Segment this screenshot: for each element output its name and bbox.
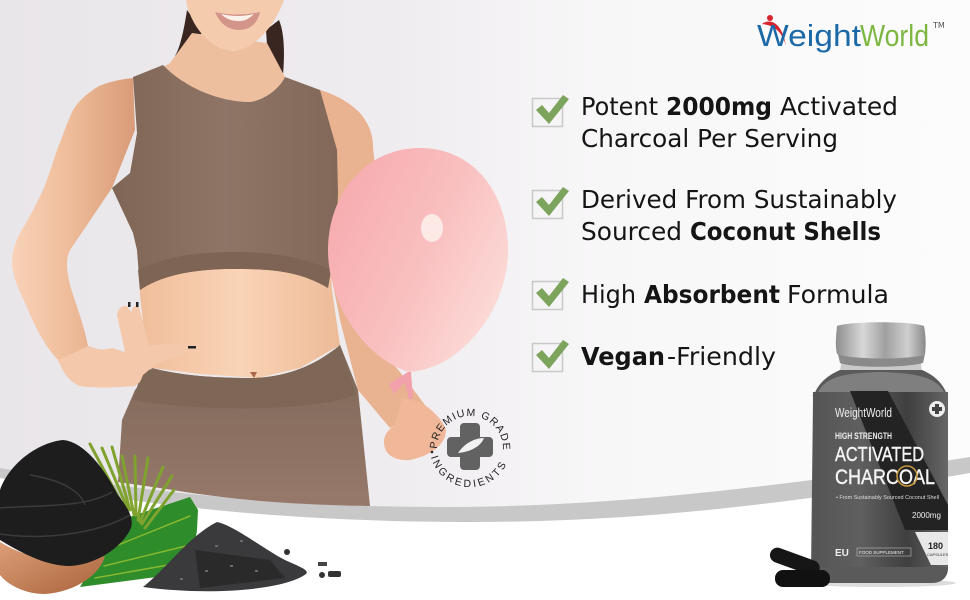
product bottle: 2000mg bbox=[912, 511, 941, 520]
coconut shell bbox=[0, 542, 105, 594]
check item 3: Formula bbox=[787, 280, 889, 309]
label text: WeightWorld bbox=[835, 405, 892, 420]
white swoosh base bbox=[0, 457, 970, 600]
woman figure bbox=[12, 0, 446, 506]
product bottle: FOOD SUPPLEMENT bbox=[859, 550, 904, 555]
badge: premium grade ingredients: INGREDIENTS bbox=[431, 456, 506, 487]
palm leaf bbox=[80, 444, 198, 587]
label dark band bbox=[850, 391, 948, 530]
product bottle: ACTIVATED bbox=[835, 444, 924, 466]
check item 4: Vegan bbox=[581, 342, 665, 371]
bottle cap bbox=[836, 322, 926, 358]
crop top hem bbox=[138, 252, 331, 290]
capsules bbox=[768, 546, 822, 577]
badge cross icon bbox=[447, 423, 493, 470]
smile bbox=[215, 12, 260, 30]
shorts bbox=[118, 345, 370, 506]
check item 2 bbox=[532, 185, 897, 246]
logo text: Weight bbox=[757, 18, 861, 53]
check item 2: Sourced bbox=[581, 217, 682, 246]
check item 4 bbox=[532, 340, 776, 372]
cap ring bbox=[838, 354, 925, 367]
logo figure bbox=[762, 22, 786, 46]
product bottle: • From Sustainably Sourced Coconut Shell bbox=[836, 495, 939, 501]
bottle glass bbox=[811, 370, 948, 583]
badge text: PREMIUM GRADE bbox=[430, 408, 510, 450]
logo: WeightWorld: World bbox=[860, 18, 929, 53]
charcoal, palm leaf and powder bbox=[0, 440, 341, 594]
check item 1 bbox=[532, 92, 898, 153]
charcoal chunk bbox=[0, 440, 132, 566]
charcoal layers bbox=[0, 475, 130, 536]
bottle shadow bbox=[804, 579, 956, 587]
badge leaf bbox=[458, 438, 484, 453]
label seal bbox=[929, 401, 945, 417]
balloon hand bbox=[384, 398, 446, 460]
powder specks bbox=[180, 540, 258, 580]
neck bbox=[163, 33, 285, 102]
balloon knot bbox=[389, 372, 413, 400]
charcoal powder bbox=[143, 522, 307, 591]
check item 3: High bbox=[581, 280, 636, 309]
label EU and supplement: EU bbox=[835, 548, 849, 559]
check item 4: -Friendly bbox=[667, 342, 776, 371]
check item 3 bbox=[532, 278, 889, 310]
check item 1: Activated bbox=[780, 92, 898, 121]
check item 2: Derived From Sustainably bbox=[581, 185, 897, 214]
badge: premium grade ingredients bbox=[430, 408, 510, 487]
logo: WeightWorld bbox=[757, 15, 945, 53]
crop top bbox=[112, 65, 338, 290]
label corner 180 capsules bbox=[915, 532, 948, 565]
left arm bbox=[12, 78, 135, 380]
face bbox=[186, 0, 284, 51]
pointing hand bbox=[58, 306, 195, 388]
check item 2: Coconut Shells bbox=[690, 217, 881, 246]
check item 1: Potent bbox=[581, 92, 658, 121]
benefit list bbox=[532, 92, 898, 372]
product bottle: CAPSULES bbox=[927, 552, 949, 557]
product bottle bbox=[768, 322, 956, 587]
balloon highlight bbox=[421, 214, 443, 242]
midriff bbox=[138, 262, 340, 378]
waistband shade bbox=[133, 345, 356, 408]
right arm bbox=[320, 90, 425, 428]
hair bbox=[175, 10, 284, 75]
product bottle: CHARCOAL bbox=[835, 466, 935, 489]
navel bbox=[250, 372, 257, 378]
bottle label bbox=[813, 392, 948, 567]
product bottle: 180 bbox=[928, 541, 943, 551]
bottle neck bbox=[840, 356, 922, 372]
check item 3: Absorbent bbox=[644, 280, 780, 309]
hand fingernails bbox=[128, 302, 196, 348]
check item 1: 2000mg bbox=[666, 92, 772, 121]
balloon bbox=[328, 148, 508, 400]
product bottle: HIGH STRENGTH bbox=[835, 431, 892, 442]
glass highlight bbox=[812, 372, 948, 396]
check item 1: Charcoal Per Serving bbox=[581, 124, 838, 153]
logo: WeightWorld: TM bbox=[932, 21, 945, 30]
